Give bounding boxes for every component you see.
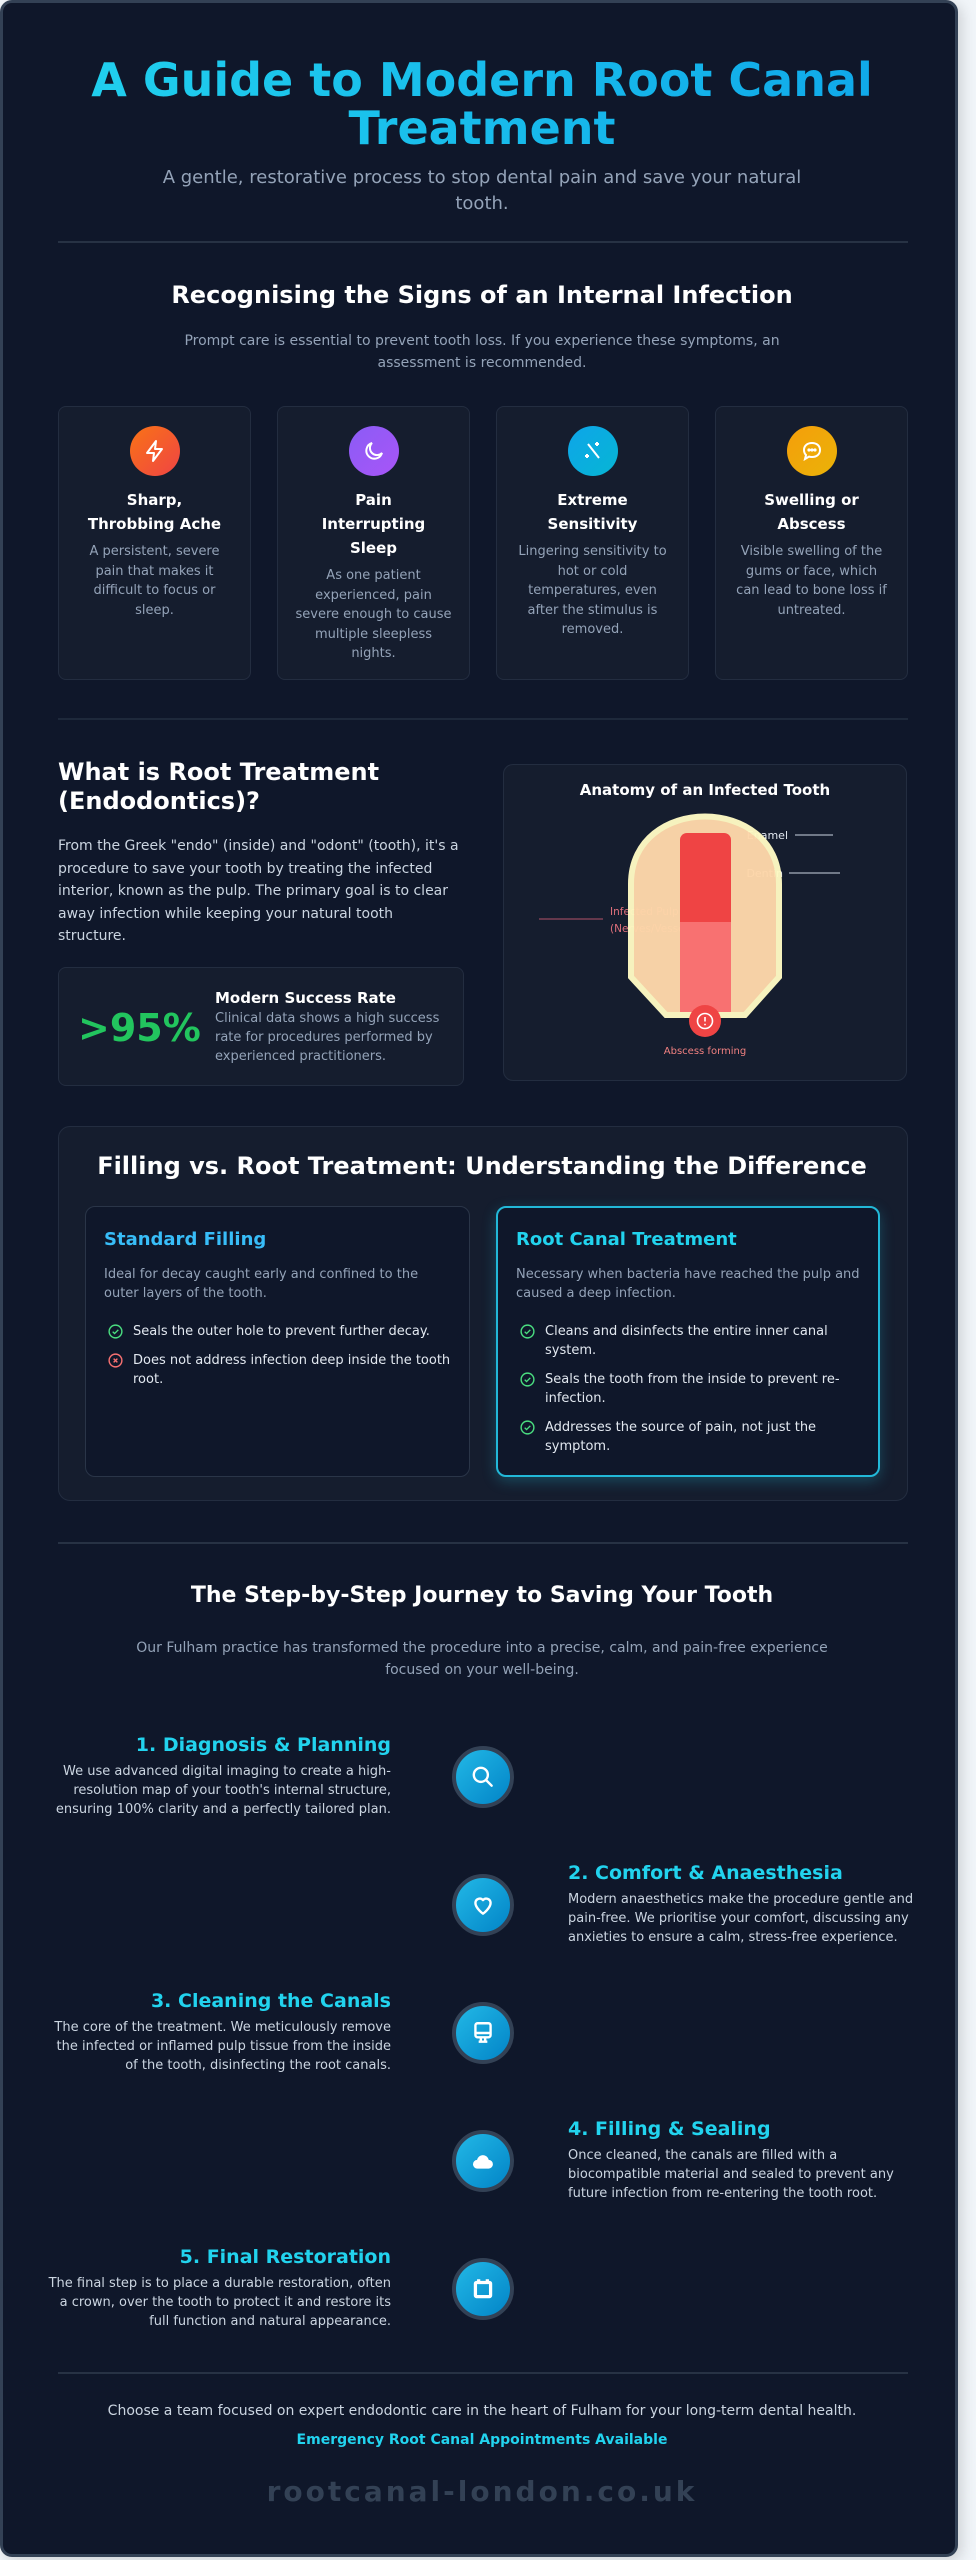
symptom card: sleep: severe enough to cause — [295, 607, 452, 622]
step 4: Once cleaned, the canals are filled with a — [568, 2148, 837, 2163]
journey description: Our Fulham practice has transformed the procedure into a precise, calm, and pain-free experience — [136, 1640, 828, 1656]
box: standard filling: Ideal for decay caught early and confined to the — [104, 1267, 418, 1282]
symptom card: sleep: Sleep — [350, 539, 397, 557]
item: seals — [520, 1372, 840, 1406]
box: standard filling — [85, 1206, 470, 1477]
paragraph: definition: From the Greek "endo" (inside) and "odont" (tooth), it's a procedure to save your tooth by treating the infected interior, known as the pulp. The primary goal is to clear away infection while keeping your natural tooth structure. — [58, 838, 459, 944]
symptom card: sleep: nights. — [351, 646, 396, 661]
icon: magnifier — [452, 1746, 514, 1808]
icon: chat bubble — [786, 426, 836, 476]
icon: monitor — [452, 2002, 514, 2064]
item: cleans: system. — [545, 1343, 596, 1358]
box: root canal treatment: Necessary when bacteria have reached the pulp and — [516, 1267, 860, 1282]
anatomy diagram: Abscess forming — [664, 1046, 746, 1057]
symptom card: ache: Sharp, — [127, 491, 182, 509]
step 4: biocompatible material and sealed to prevent any — [568, 2167, 894, 2182]
subtitle — [163, 167, 801, 214]
step 4: future infection from re-entering the tooth root. — [568, 2186, 877, 2201]
symptom card: ache: sleep. — [135, 602, 174, 618]
heading: what is root treatment: (Endodontics)? — [58, 787, 260, 815]
panel: filling vs root treatment — [58, 1126, 908, 1501]
step 1: We use advanced digital imaging to create a high- — [63, 1764, 391, 1779]
icon: calendar — [452, 2258, 514, 2320]
symptom card: sleep: Interrupting — [322, 515, 425, 533]
symptom card: sensitivity: Sensitivity — [548, 515, 637, 533]
step 2: 2. Comfort & Anaesthesia — [568, 1862, 843, 1884]
title — [3, 56, 961, 152]
footer text: Choose a team focused on expert endodontic care in the heart of Fulham for your long-term dental health. — [108, 2403, 856, 2419]
subtitle: tooth. — [455, 193, 509, 214]
icon: moon — [348, 426, 398, 476]
title: Treatment — [348, 101, 616, 155]
signs description: Prompt care is essential to prevent tooth loss. If you experience these symptoms, an — [184, 333, 780, 349]
symptom card: swelling: can lead to bone loss if — [736, 583, 887, 598]
step 1: 1. Diagnosis & Planning — [136, 1734, 391, 1756]
heading: what is root treatment: What is Root Treatment — [58, 758, 379, 786]
anatomy diagram: (Nerves/Vessels) — [610, 923, 697, 935]
item: cleans: Cleans and disinfects the entire inner canal — [545, 1324, 828, 1339]
icon: heart — [452, 1874, 514, 1936]
step 3: the infected or inflamed pulp tissue from the inside — [57, 2039, 391, 2054]
panel: tooth anatomy — [503, 764, 907, 1081]
item: cross: root. — [133, 1372, 163, 1387]
signs description: assessment is recommended. — [378, 355, 586, 371]
heading: journey: The Step-by-Step Journey to Saving Your Tooth — [191, 1583, 773, 1608]
stat description: experienced practitioners. — [215, 1049, 386, 1064]
step 2 — [568, 1862, 913, 1945]
step 4: 4. Filling & Sealing — [568, 2118, 771, 2140]
step 5: full function and natural appearance. — [149, 2314, 391, 2329]
symptom card: sensitivity — [496, 406, 689, 680]
stat description — [215, 1011, 439, 1064]
anatomy diagram — [539, 781, 840, 1057]
step 2: pain-free. We prioritise your comfort, discussing any — [568, 1911, 909, 1926]
box: standard filling: outer layers of the tooth. — [104, 1286, 267, 1301]
symptom card: swelling: untreated. — [777, 602, 846, 618]
symptom card: ache — [58, 406, 251, 680]
stat label: Modern Success Rate — [215, 989, 396, 1007]
symptom card: sleep: As one patient — [326, 568, 421, 583]
step 2: anxieties to ensure a calm, stress-free experience. — [568, 1930, 898, 1945]
icon: cloud — [452, 2130, 514, 2192]
anatomy diagram: Dentin — [746, 867, 783, 880]
item: seals: infection. — [545, 1391, 606, 1406]
step 5: The final step is to place a durable restoration, often — [49, 2276, 391, 2291]
step 3: of the tooth, disinfecting the root canals. — [125, 2058, 391, 2073]
item: check: Seals the outer hole to prevent further decay. — [133, 1324, 430, 1339]
step 3: 3. Cleaning the Canals — [151, 1990, 391, 2012]
symptom card: swelling — [715, 406, 908, 680]
box: root canal treatment: caused a deep infection. — [516, 1286, 676, 1301]
watermark: rootcanal-london.co.uk — [267, 2475, 697, 2508]
symptom card: swelling: Swelling or — [764, 491, 859, 509]
step 1: ensuring 100% clarity and a perfectly tailored plan. — [56, 1802, 391, 1817]
step 3 — [54, 1990, 391, 2073]
symptom card: sensitivity: temperatures, even — [528, 583, 657, 598]
step 5 — [48, 2246, 391, 2329]
item: addresses: Addresses the source of pain, not just the — [545, 1420, 816, 1435]
symptom card: sleep: Pain — [355, 491, 392, 509]
step 1 — [56, 1734, 391, 1817]
icon: lightning — [130, 426, 180, 476]
item: cross: Does not address infection deep inside the tooth — [133, 1353, 450, 1368]
step 2: Modern anaesthetics make the procedure gentle and — [568, 1892, 913, 1907]
symptom card: sensitivity: Lingering sensitivity to — [518, 544, 667, 559]
heading: signs: Recognising the Signs of an Internal Infection — [171, 281, 793, 309]
anatomy diagram: Anatomy of an Infected Tooth — [580, 781, 830, 799]
journey description — [136, 1640, 828, 1678]
step 5: 5. Final Restoration — [180, 2246, 391, 2268]
anatomy diagram: Infected Pulp — [610, 906, 679, 918]
stat description: Clinical data shows a high success — [215, 1011, 439, 1026]
symptom card: ache: A persistent, severe — [90, 544, 220, 559]
symptom card: ache: Throbbing Ache — [88, 515, 221, 533]
box: standard filling: Standard Filling — [104, 1229, 266, 1250]
signs description — [184, 333, 780, 371]
item: cross — [108, 1353, 450, 1387]
symptom card: sensitivity: hot or cold — [558, 564, 627, 578]
box: root canal treatment: Root Canal Treatment — [516, 1229, 737, 1250]
step 4 — [568, 2118, 894, 2201]
symptom card: ache: difficult to focus or — [94, 583, 215, 598]
symptom card: sleep — [277, 406, 470, 680]
subtitle: A gentle, restorative process to stop dental pain and save your natural — [163, 167, 801, 188]
box: root canal treatment — [496, 1206, 880, 1477]
heading: comparison: Filling vs. Root Treatment: Understanding the Difference — [97, 1152, 867, 1180]
stat box: success rate — [58, 967, 464, 1086]
icon: sparkle wand — [568, 426, 618, 476]
footer callout: Emergency Root Canal Appointments Available — [297, 2432, 667, 2448]
title: A Guide to Modern Root Canal — [91, 53, 873, 107]
symptom card: sensitivity: after the stimulus is — [528, 602, 657, 618]
item: seals: Seals the tooth from the inside to prevent re- — [545, 1372, 840, 1387]
step 3: The core of the treatment. We meticulously remove — [54, 2020, 391, 2035]
journey description: focused on your well-being. — [385, 1662, 579, 1678]
stat description: rate for procedures performed by — [215, 1030, 433, 1045]
item: addresses — [520, 1420, 816, 1454]
step 1: resolution map of your tooth's internal structure, — [73, 1783, 391, 1798]
step 5: a crown, over the tooth to protect it and restore its — [60, 2295, 391, 2310]
symptom card: sleep: experienced, pain — [315, 588, 432, 602]
item: cleans — [520, 1324, 828, 1358]
symptom card: sensitivity: removed. — [562, 622, 623, 637]
symptom card: sensitivity: Extreme — [557, 491, 628, 509]
item: addresses: symptom. — [545, 1439, 610, 1454]
symptom card: swelling: Visible swelling of the — [741, 544, 882, 559]
symptom card: sleep: multiple sleepless — [315, 626, 432, 642]
anatomy diagram: Enamel — [747, 829, 788, 842]
symptom card: swelling: gums or face, which — [746, 564, 877, 578]
symptom card: ache: pain that makes it — [95, 564, 214, 578]
stat number: >95% — [78, 1006, 201, 1050]
symptom card: swelling: Abscess — [777, 515, 846, 533]
heading: what is root treatment — [58, 758, 379, 815]
